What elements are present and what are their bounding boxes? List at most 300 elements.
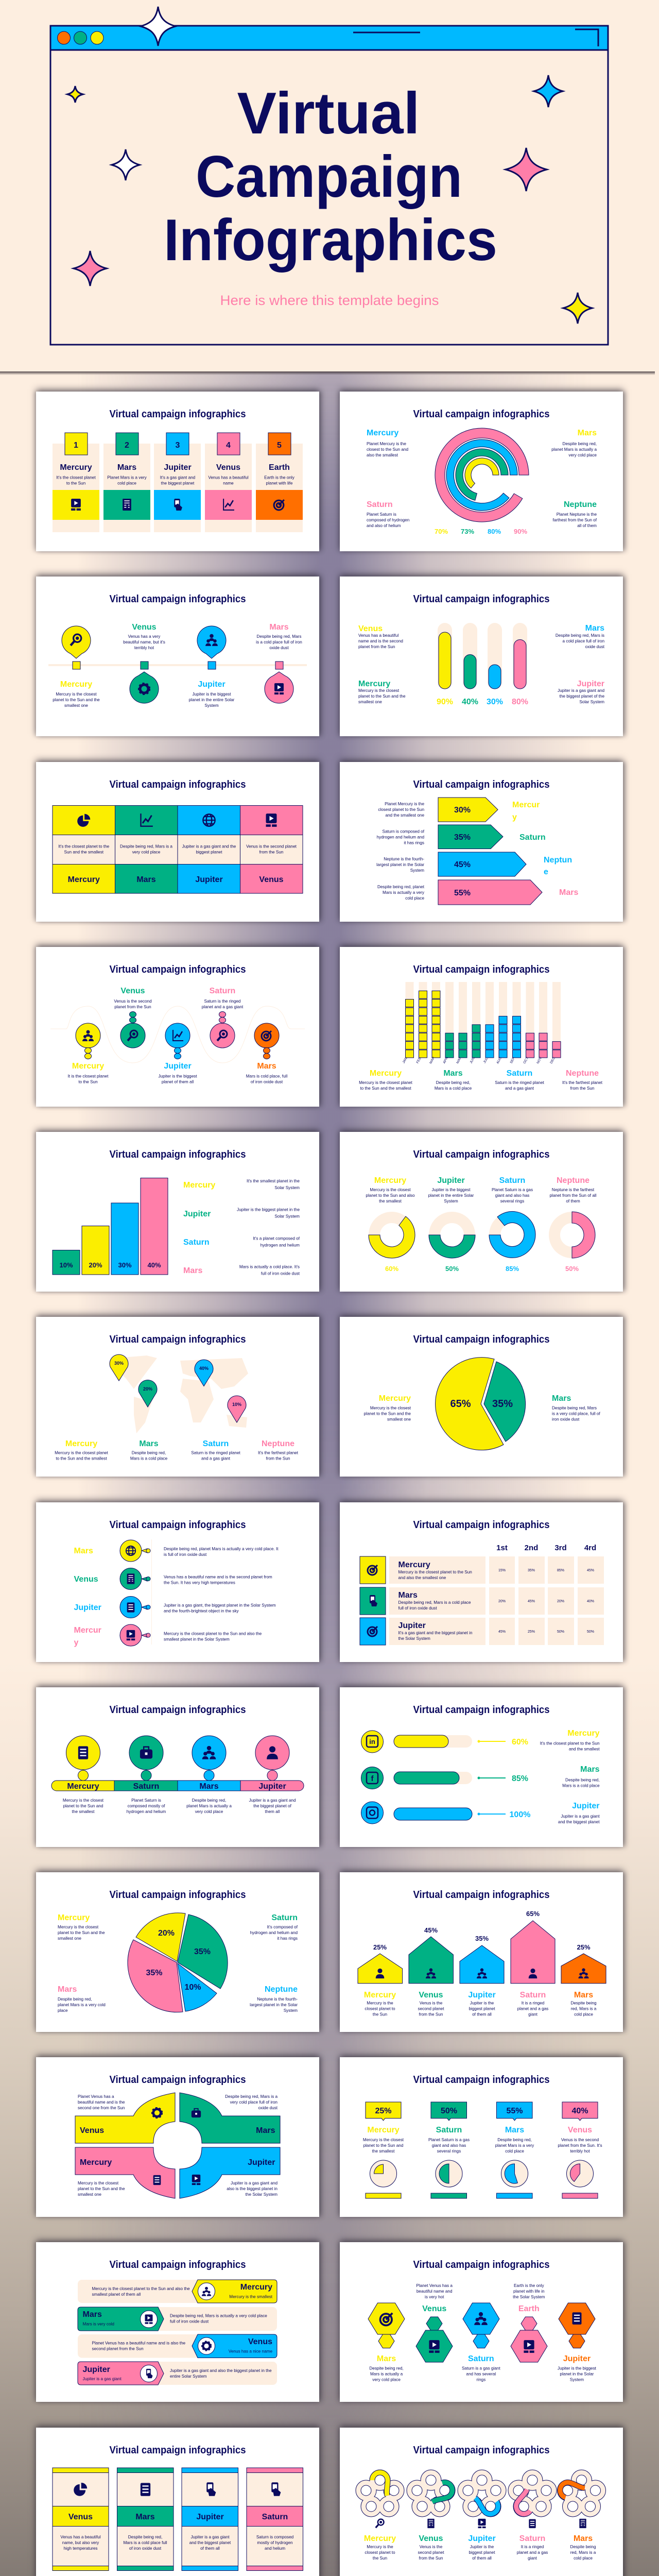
hexagon: Earth: Earth — [518, 2304, 540, 2313]
knot: Mars: cold place — [574, 2556, 593, 2561]
descriptions: Despite being red, — [192, 1798, 226, 1803]
house: Saturn: 65% — [526, 1910, 540, 1918]
block chart: OCT — [523, 1057, 529, 1064]
row: Venus: second planet from the Sun — [92, 2346, 144, 2351]
knot: Saturn: It is a ringed — [521, 2545, 544, 2549]
label: Saturn: hydrogen and helium and — [250, 1930, 298, 1935]
milestone: Mercury: Mercury is the closest — [56, 692, 97, 697]
map pins: 40% — [199, 1366, 209, 1371]
label: Neptune — [250, 1985, 298, 2013]
pie chart: 35% — [146, 1969, 163, 1977]
label: Mars: very cold place — [568, 453, 597, 457]
bar chart: 90% — [437, 698, 453, 706]
pie chart — [436, 1358, 526, 1450]
panel: stacked block chart — [340, 947, 623, 1107]
legend: Jupiter — [183, 1208, 300, 1219]
row: Mars — [360, 1587, 604, 1615]
labelled bar: Jupiter — [258, 1782, 286, 1791]
row: Jupiter — [74, 1596, 276, 1618]
arrow: Mars: Mars — [559, 888, 578, 897]
descriptions: Planet Saturn is — [131, 1798, 161, 1803]
column headers: 4rd — [584, 1544, 596, 1552]
label: Mars: Mars — [443, 1069, 463, 1078]
title: Virtual campaign infographics — [413, 594, 550, 605]
house: Venus: Venus is the — [420, 2001, 442, 2005]
label: Neptune: Neptune — [265, 1985, 298, 1994]
label: Venus: name and is the second — [358, 639, 403, 643]
node: Jupiter: planet of them all — [162, 1080, 194, 1084]
bar chart: 40% — [147, 1261, 161, 1269]
label: Saturn: and a gas giant — [505, 1086, 534, 1091]
legend: Jupiter: Jupiter is the biggest planet in the — [237, 1208, 300, 1212]
row: Venus: Planet Venus has a beautiful name and is also the — [92, 2341, 185, 2345]
label: Mars: is a very cold place, full of — [552, 1412, 600, 1416]
label: Mercury — [358, 680, 406, 704]
knot: Jupiter: of them all — [472, 2556, 492, 2561]
panel: two-slice pie — [340, 1317, 623, 1477]
label: Mercury: Mercury — [65, 1439, 97, 1448]
card: Mercury 25% — [363, 2102, 404, 2198]
column headers: 3rd — [554, 1544, 567, 1552]
label: Mars: oxide dust — [585, 645, 605, 649]
label: Mercury: Planet Mercury is the — [367, 442, 406, 446]
column: Venus: name — [223, 481, 234, 485]
row: Venus — [74, 1568, 272, 1590]
milestone: Jupiter: planet in the entire Solar — [189, 698, 235, 702]
node: Mars: Mars — [257, 1062, 276, 1071]
donut: Mercury — [366, 1176, 415, 1273]
percentages: 73% — [461, 528, 474, 535]
row: Mars: 20% — [557, 1600, 564, 1603]
table: very cold place — [132, 850, 161, 854]
label: Venus: planet from the Sun — [358, 645, 395, 649]
block chart — [402, 982, 561, 1064]
card: Saturn: Saturn — [262, 2513, 288, 2521]
house: Saturn: planet and a gas — [517, 2006, 548, 2011]
shape: Jupiter: Jupiter — [248, 2158, 275, 2167]
bar chart — [53, 1178, 168, 1275]
label: Saturn: Saturn — [271, 1913, 298, 1922]
milestone: Venus — [123, 623, 165, 703]
row: Mars: Despite being red, Mars is actually a very cold place — [170, 2313, 267, 2318]
hexagon: Jupiter: Jupiter — [563, 2354, 591, 2363]
card: Venus: Venus has a beautiful — [60, 2535, 101, 2539]
knot: Mercury: Mercury — [364, 2534, 396, 2543]
house: Saturn: giant — [528, 2012, 538, 2016]
title: Virtual campaign infographics — [413, 2259, 550, 2270]
row: Jupiter 100%: Jupiter — [572, 1802, 599, 1810]
card: Mars 55%: cold place — [505, 2149, 524, 2154]
hexagon: Venus — [416, 2283, 453, 2362]
pie chart: 10% — [184, 1983, 201, 1992]
shape: Mercury: Mercury is the closest — [78, 2181, 118, 2185]
node: Jupiter: Jupiter — [164, 1062, 192, 1071]
milestone: Mercury — [53, 626, 100, 708]
row: Mars 85%: Mars is a cold place — [562, 1784, 600, 1788]
table: Sun and the smallest — [64, 850, 104, 854]
label: Jupiter: Jupiter — [577, 680, 604, 688]
column: Jupiter: It's a gas giant and — [160, 475, 195, 480]
house: Jupiter: Jupiter is the — [470, 2001, 494, 2005]
card: Mercury 25%: planet to the Sun and — [363, 2143, 404, 2148]
donut: Jupiter — [428, 1176, 475, 1273]
row: Jupiter: Jupiter is a gas giant, the biggest planet in the Solar System — [164, 1603, 276, 1607]
house: Venus: 45% — [424, 1926, 438, 1934]
knot: Jupiter: Jupiter is the — [470, 2545, 494, 2549]
house: Mercury: closest planet to — [365, 2006, 395, 2011]
card: Mars: Mars — [135, 2513, 155, 2521]
arrow: Neptune: System — [410, 868, 424, 873]
label: Jupiter: Jupiter is a gas giant and — [558, 688, 604, 693]
table: Mercury — [68, 875, 100, 884]
card: Venus 40%: Venus is the second — [561, 2138, 599, 2142]
title: Virtual campaign infographics — [413, 779, 550, 790]
milestone: Jupiter: Jupiter — [198, 680, 226, 689]
label: Saturn: Saturn is the ringed planet — [495, 1080, 544, 1085]
legend: Mercury: It's the smallest planet in the — [247, 1179, 300, 1183]
table: Venus — [259, 875, 284, 884]
descriptions: planet Mars is actually a — [186, 1804, 232, 1808]
title: Virtual campaign infographics — [109, 2074, 246, 2086]
row: Jupiter: the Solar System — [398, 1636, 430, 1641]
block chart: SEP — [510, 1057, 516, 1064]
card: Mars 55% — [495, 2102, 534, 2198]
hexagon: Earth: the Solar System — [513, 2295, 545, 2299]
title: Virtual campaign infographics — [109, 2445, 246, 2456]
title: Virtual campaign infographics — [109, 2259, 246, 2270]
house: Mercury: Mercury is the — [367, 2001, 393, 2005]
table: Despite being red, Mars is a — [120, 844, 172, 849]
label: Mars — [551, 429, 597, 457]
title: Virtual campaign infographics — [109, 1334, 246, 1345]
panel: social progress — [340, 1687, 623, 1847]
balloons — [66, 1736, 289, 1781]
card: Saturn 50%: Saturn — [436, 2126, 462, 2134]
knot: Venus: Venus — [419, 2534, 443, 2543]
donut: Saturn: 85% — [506, 1265, 519, 1273]
panel: balloon bar — [36, 1687, 319, 1847]
label: Mercury: Mercury is the closest — [370, 1405, 411, 1411]
row: Venus: Venus has a beautiful name and is the second planet from — [164, 1574, 272, 1580]
knot: Saturn — [511, 2472, 554, 2561]
card: Saturn 50% — [428, 2102, 470, 2198]
column: Mars — [103, 433, 150, 532]
donut: Saturn: giant and also has — [495, 1193, 529, 1198]
panel: numbered columns — [36, 392, 319, 551]
milestone: Venus: beautiful name, but it's — [123, 640, 165, 645]
row: Jupiter: Jupiter is a gas giant and also the biggest planet in the — [170, 2368, 272, 2373]
label: Saturn — [191, 1439, 241, 1461]
donut: Neptune: 50% — [565, 1265, 579, 1273]
label: Mercury: Mercury is the closest — [358, 688, 399, 693]
descriptions: planet to the Sun and — [63, 1804, 103, 1808]
hero subtitle: Here is where this template begins — [220, 293, 439, 308]
house: Venus — [409, 1926, 453, 2016]
descriptions: them all — [265, 1809, 280, 1814]
label: Mercury: Mercury — [370, 1069, 402, 1078]
row: Jupiter 100%: Jupiter is a gas giant — [561, 1814, 599, 1819]
label: Saturn: it has rings — [277, 1936, 298, 1941]
house: Jupiter: biggest planet — [469, 2006, 495, 2011]
row: Mercury: 15% — [498, 1569, 506, 1572]
donut: Neptune: Neptune — [557, 1176, 589, 1185]
column: Earth — [256, 433, 303, 532]
knot: Jupiter: biggest planet — [469, 2550, 495, 2555]
column: Venus: Venus — [216, 463, 240, 472]
label: Mars: Despite being red, — [563, 442, 597, 446]
row: Mars 85%: f — [371, 1774, 374, 1783]
label: Mercury: planet to the Sun and the — [363, 1412, 411, 1416]
milestone: Mars: oxide dust — [269, 646, 289, 650]
row: Mars — [74, 1540, 279, 1562]
label: Neptune: It's the farthest planet — [258, 1451, 298, 1455]
hexagon: Saturn: Saturn is a gas giant — [462, 2366, 500, 2371]
hexagon: Mars: Mars — [377, 2354, 396, 2363]
label: Saturn: Saturn — [507, 1069, 532, 1078]
arrow: Neptune: e — [544, 868, 548, 876]
donut: Neptune: planet from the Sun of all — [549, 1193, 597, 1198]
label: Mercury: planet to the Sun and the — [58, 1930, 105, 1935]
shape: Venus: Venus — [80, 2126, 104, 2135]
label: Mars: planet Mars is actually a — [551, 447, 597, 452]
row: Jupiter: Jupiter — [82, 2365, 110, 2374]
row: Mars: full of iron oxide dust — [398, 1606, 437, 1611]
arrow: Mercury: closest planet to the Sun — [378, 807, 424, 812]
hexagon: Saturn — [462, 2303, 500, 2382]
row: Mars: Despite being red, planet Mars is actually a very cold place. It — [164, 1547, 279, 1551]
label: Mars: Despite being red, — [58, 1997, 92, 2002]
panel: pin timeline — [36, 577, 319, 736]
label: Neptune: from the Sun — [266, 1456, 290, 1461]
title: Virtual campaign infographics — [109, 409, 246, 420]
row: Jupiter: Jupiter — [398, 1621, 426, 1630]
label: Jupiter: Solar System — [579, 700, 604, 704]
table: Jupiter is a gas giant and the — [182, 844, 236, 849]
row: Mercury — [78, 2280, 277, 2303]
row: Mercury: Mercury is the closest planet to the Sun — [398, 1570, 472, 1574]
row: Mercury: y — [74, 1638, 78, 1647]
percentages: 70% — [435, 528, 448, 535]
label: Saturn: Saturn — [367, 500, 393, 509]
row: Venus: the Sun. It has very high temperatures — [164, 1581, 235, 1585]
arrow: Neptune: largest planet in the Solar — [376, 862, 424, 867]
arrow: Saturn: Saturn — [519, 833, 546, 842]
hexagon: Saturn: Saturn — [468, 2354, 494, 2363]
shape: Jupiter: also is the biggest planet in — [227, 2187, 278, 2191]
panel: houses — [340, 1872, 623, 2032]
arrow: Mercury: y — [512, 813, 517, 822]
label: Mercury: smallest one — [358, 700, 382, 704]
label: Mercury: Mercury — [379, 1394, 411, 1403]
title: Virtual campaign infographics — [413, 1149, 550, 1160]
legend: Saturn: Saturn — [183, 1238, 210, 1247]
node: Venus: Venus — [120, 987, 145, 995]
row: Jupiter: 45% — [498, 1630, 506, 1634]
labelled bar: Saturn — [133, 1782, 159, 1791]
row: Jupiter: 50% — [557, 1630, 564, 1634]
label: Venus — [358, 624, 403, 649]
arrow: Saturn: 35% — [454, 833, 471, 842]
label: Mercury — [55, 1439, 109, 1461]
knot: Saturn: planet and a gas — [517, 2550, 548, 2555]
label: Mars: Mars — [58, 1985, 77, 1994]
bar chart: 40% — [462, 698, 478, 706]
hexagon: Jupiter: System — [570, 2377, 584, 2382]
label: Jupiter: the biggest planet of the — [560, 694, 604, 699]
node: Saturn: Saturn — [210, 987, 235, 995]
labelled bar: Mercury — [67, 1782, 99, 1791]
column: Mercury — [53, 433, 99, 532]
legend: Mars: full of iron oxide dust — [261, 1272, 300, 1276]
card: Saturn 50%: several rings — [437, 2149, 461, 2154]
card: Venus: high temperatures — [64, 2546, 98, 2551]
labelled bar: Mars — [199, 1782, 219, 1791]
house: Jupiter: of them all — [472, 2012, 492, 2016]
milestone: Mars: Despite being red, Mars — [257, 634, 301, 639]
legend: Mars: Mars is actually a cold place. It's — [239, 1264, 300, 1269]
panel: vertical progress bars — [340, 577, 623, 736]
block chart: APR — [442, 1056, 449, 1064]
arrow: Neptune — [376, 852, 572, 876]
row: Jupiter 100%: 100% — [510, 1810, 530, 1819]
label: Mars: Despite being red, Mars is — [556, 633, 604, 638]
label: Neptune: Planet Neptune is the — [557, 512, 597, 517]
label: Neptune: Neptune is the fourth- — [257, 1997, 298, 2002]
descriptions: the smallest — [72, 1809, 95, 1814]
title: Virtual campaign infographics — [109, 1889, 246, 1901]
house: Mercury: 25% — [373, 1943, 387, 1951]
hexagon: Saturn: rings — [476, 2377, 485, 2382]
column: Earth: Earth is the only — [264, 475, 294, 480]
card: Venus 40%: 40% — [571, 2107, 588, 2115]
label: Mercury — [58, 1913, 105, 1941]
hexagon: Mars: Mars is actually a — [370, 2372, 403, 2376]
legend: Mercury: Mercury — [183, 1181, 215, 1190]
house: Mars — [561, 1943, 606, 2016]
knot: Venus — [409, 2472, 455, 2561]
block chart: FEB — [416, 1057, 422, 1064]
row: Mars: 40% — [587, 1600, 594, 1603]
donut: Saturn: several rings — [500, 1199, 524, 1204]
card: Mercury 25%: 25% — [375, 2107, 392, 2115]
table — [53, 806, 303, 893]
row: Mars: Mars is very cold — [82, 2321, 114, 2327]
title: Virtual campaign infographics — [413, 1334, 550, 1345]
node: Jupiter — [158, 1023, 197, 1084]
pie chart: 35% — [492, 1398, 513, 1410]
row: Mercury: Mercury is the smallest — [229, 2295, 273, 2299]
label: Neptune: all of them — [577, 523, 597, 528]
shape: Jupiter — [180, 2147, 280, 2198]
title: Virtual campaign infographics — [413, 1704, 550, 1716]
house: Mercury — [358, 1943, 403, 2016]
bar chart: 30% — [487, 698, 503, 706]
donut: Saturn — [489, 1176, 535, 1273]
donut: Mercury: Mercury is the closest — [370, 1188, 411, 1192]
label: Mercury: Mercury is the closest planet — [55, 1451, 108, 1455]
milestone: Mars: Mars — [269, 623, 289, 632]
hexagon: Saturn: and has several — [466, 2372, 496, 2376]
row: Jupiter: and the fourth-brightest object in the sky — [164, 1608, 239, 1614]
row: Jupiter — [360, 1618, 604, 1645]
block chart: JAN — [402, 1057, 408, 1064]
row: Mars 85%: Despite being red, — [565, 1777, 599, 1783]
legend: Mercury — [183, 1179, 300, 1190]
hexagon: Earth — [511, 2283, 547, 2362]
card: Mercury 25%: the smallest — [372, 2149, 395, 2154]
label: Neptune: farthest from the Sun of — [552, 518, 597, 522]
row: Mercury 60%: It's the closest planet to the Sun — [540, 1741, 599, 1745]
node: Mars: of iron oxide dust — [251, 1080, 283, 1084]
shape: Mercury: Mercury — [80, 2158, 112, 2167]
hero: browser window — [50, 26, 608, 345]
hexagon: Venus: is very hot — [425, 2295, 444, 2299]
column: Jupiter: the biggest planet — [161, 481, 195, 485]
legend: Saturn — [183, 1236, 300, 1248]
title: Virtual campaign infographics — [109, 964, 246, 975]
house: Mercury: the Sun — [373, 2012, 388, 2016]
row: Mercury: Mercury is the closest planet to the Sun and also the — [92, 2286, 190, 2291]
donut: Mercury: 60% — [385, 1265, 398, 1273]
label: Mercury: closest to the Sun and — [367, 447, 408, 452]
row: Venus: Venus — [74, 1575, 98, 1584]
row: Mars — [78, 2307, 277, 2331]
table: Jupiter — [195, 875, 223, 884]
donut: Jupiter: Jupiter is the biggest — [431, 1188, 471, 1192]
node: Jupiter: Jupiter is the biggest — [158, 1074, 197, 1079]
card: Saturn: Saturn is composed — [256, 2535, 293, 2539]
node: Saturn: planet and a gas giant — [202, 1005, 244, 1009]
row: Mercury: 35% — [528, 1569, 535, 1572]
arrow: Mars — [377, 880, 578, 905]
row: Venus: Venus has a nice name — [229, 2349, 272, 2353]
knot: Mars: Mars — [574, 2534, 593, 2543]
card: Jupiter: of them all — [200, 2546, 220, 2551]
label: Mars: iron oxide dust — [552, 1417, 580, 1422]
arrow: Saturn: Saturn is composed of — [383, 829, 424, 834]
labelled bar — [51, 1781, 304, 1791]
hero title: Virtual — [237, 81, 420, 146]
map pins: 10% — [232, 1402, 241, 1407]
knot: Mercury: the Sun — [373, 2556, 388, 2561]
row: Mercury 60% — [361, 1729, 600, 1753]
milestone: Venus: terribly hot — [134, 646, 154, 650]
label: Mercury — [367, 429, 408, 457]
panel: four-slice pie — [36, 1872, 319, 2032]
donut: Mercury: the smallest — [379, 1199, 402, 1204]
donut: Neptune: of them — [566, 1199, 580, 1204]
table: Mars — [136, 875, 156, 884]
node: Mercury: Mercury — [72, 1062, 104, 1071]
percentages: 80% — [488, 528, 501, 535]
block chart: MAY — [456, 1056, 462, 1064]
label: Venus: Venus — [358, 624, 383, 633]
row: Mercury 60%: Mercury — [567, 1729, 600, 1738]
node: Mercury: to the Sun — [78, 1080, 98, 1084]
arrow: Mercury: 30% — [454, 806, 471, 815]
column: Venus: Venus has a beautiful — [208, 475, 249, 480]
milestone: Mercury: planet to the Sun and the — [53, 698, 100, 702]
table: Venus is the second planet — [246, 844, 297, 849]
shape: Mars: oxide dust — [258, 2106, 278, 2110]
card: Mars: of iron oxide dust — [129, 2546, 162, 2551]
bar chart: 80% — [512, 698, 528, 706]
panel: pointer list — [36, 1502, 319, 1662]
node: Venus — [114, 987, 152, 1048]
knot: Jupiter: Jupiter — [468, 2534, 496, 2543]
knot: Mercury — [358, 2472, 402, 2561]
bar chart: 30% — [118, 1261, 132, 1269]
